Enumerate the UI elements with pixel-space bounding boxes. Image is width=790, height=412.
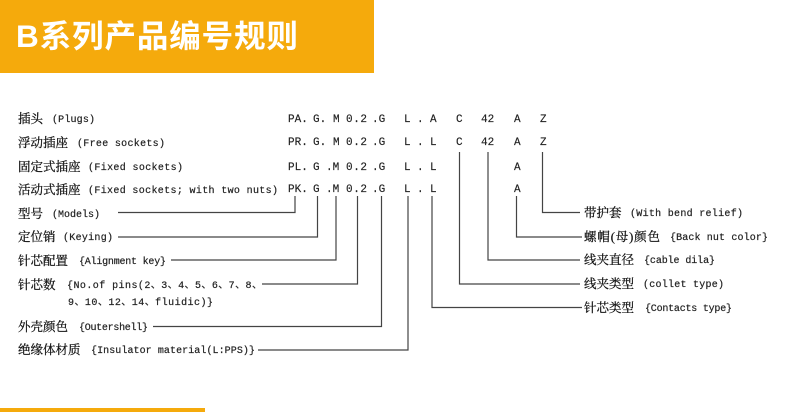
left labels: code fields: 绝缘体材质 (18, 342, 81, 357)
right labels: {Contacts type} (645, 303, 732, 315)
part number codes: .G (372, 162, 385, 174)
part number codes: G. (313, 137, 326, 149)
part number codes: 0.2 (346, 184, 367, 196)
right labels: 螺帽(母)颜色 (584, 229, 660, 244)
part number codes: PK. (288, 184, 308, 196)
left labels: code fields: {Outershell} (79, 322, 148, 334)
part number codes: . (417, 184, 424, 196)
part number codes: 0.2 (346, 137, 367, 149)
part number codes: M (333, 114, 340, 126)
part number codes: A (430, 114, 437, 126)
part number codes: .G (372, 184, 385, 196)
right labels: {cable dila} (644, 255, 715, 267)
part number codes: L (404, 137, 411, 149)
left labels: code fields: 型号 (18, 206, 43, 221)
part number codes: G (313, 184, 320, 196)
part number codes: 42 (481, 137, 494, 149)
left labels: connector types: (Fixed sockets) (88, 162, 183, 174)
part number codes: A (514, 184, 521, 196)
connector lines right (432, 152, 582, 308)
header banner (0, 0, 374, 73)
left labels: code fields: 针芯数 (18, 277, 56, 292)
part number codes: L (430, 184, 437, 196)
left labels: code fields: (Keying) (63, 232, 113, 244)
part number codes: PL. (288, 162, 308, 174)
part number codes: L (404, 184, 411, 196)
right labels: 带护套 (584, 205, 622, 220)
bottom accent bar (0, 408, 205, 412)
part number codes: A (514, 162, 521, 174)
right labels: 线夹类型 (584, 276, 634, 291)
right labels: (With bend relief) (630, 208, 743, 220)
left labels: code fields: 9、10、12、14、fluidic)} (68, 297, 213, 309)
part number codes: 0.2 (346, 162, 367, 174)
part number codes: . (417, 137, 424, 149)
left labels: connector types (18, 111, 278, 197)
part number codes: L (404, 114, 411, 126)
right labels (584, 205, 768, 315)
title: B系列产品编号规则 (16, 18, 298, 54)
left labels: code fields: 定位销 (18, 229, 56, 244)
part number codes (288, 114, 547, 196)
part number codes: PR. (288, 137, 308, 149)
part number codes: C (456, 137, 463, 149)
right labels: (collet type) (643, 279, 724, 291)
part number codes: 0.2 (346, 114, 367, 126)
part number codes: .G (372, 137, 385, 149)
part number codes: G (313, 162, 320, 174)
part number codes: . (417, 114, 424, 126)
right labels: 线夹直径 (584, 252, 635, 267)
part number codes: .M (326, 162, 339, 174)
left labels: code fields: {No.of pins(2、3、4、5、6、7、8、 (67, 280, 262, 292)
left labels: connector types: 浮动插座 (18, 135, 69, 150)
part number codes: Z (540, 137, 547, 149)
left labels: code fields: (Models) (52, 209, 100, 221)
left labels: code fields: 外壳颜色 (18, 319, 68, 334)
left labels: connector types: (Free sockets) (77, 138, 165, 150)
part number codes: . (417, 162, 424, 174)
left labels: code fields: {Alignment key} (79, 256, 166, 268)
part number codes: M (333, 137, 340, 149)
part number codes: .M (326, 184, 339, 196)
part number codes: PA. (288, 114, 308, 126)
part number codes: Z (540, 114, 547, 126)
connector lines left (118, 196, 408, 350)
part number codes: L (430, 162, 437, 174)
part number codes: 42 (481, 114, 494, 126)
left labels: connector types: 插头 (18, 111, 44, 126)
left labels: connector types: (Plugs) (52, 114, 95, 126)
right labels: {Back nut color} (670, 232, 768, 244)
part number codes: C (456, 114, 463, 126)
left labels: connector types: 固定式插座 (18, 159, 81, 174)
part number codes: A (514, 114, 521, 126)
part number codes: L (430, 137, 437, 149)
right labels: 针芯类型 (584, 300, 634, 315)
part number codes: G. (313, 114, 326, 126)
part number codes: .G (372, 114, 385, 126)
left labels: code fields: {Insulator material(L:PPS)} (91, 345, 255, 357)
left labels: connector types: (Fixed sockets; with two nuts) (88, 185, 278, 197)
left labels: code fields (18, 206, 262, 357)
part number codes: L (404, 162, 411, 174)
part number codes: A (514, 137, 521, 149)
left labels: connector types: 活动式插座 (18, 182, 81, 197)
left labels: code fields: 针芯配置 (18, 253, 69, 268)
